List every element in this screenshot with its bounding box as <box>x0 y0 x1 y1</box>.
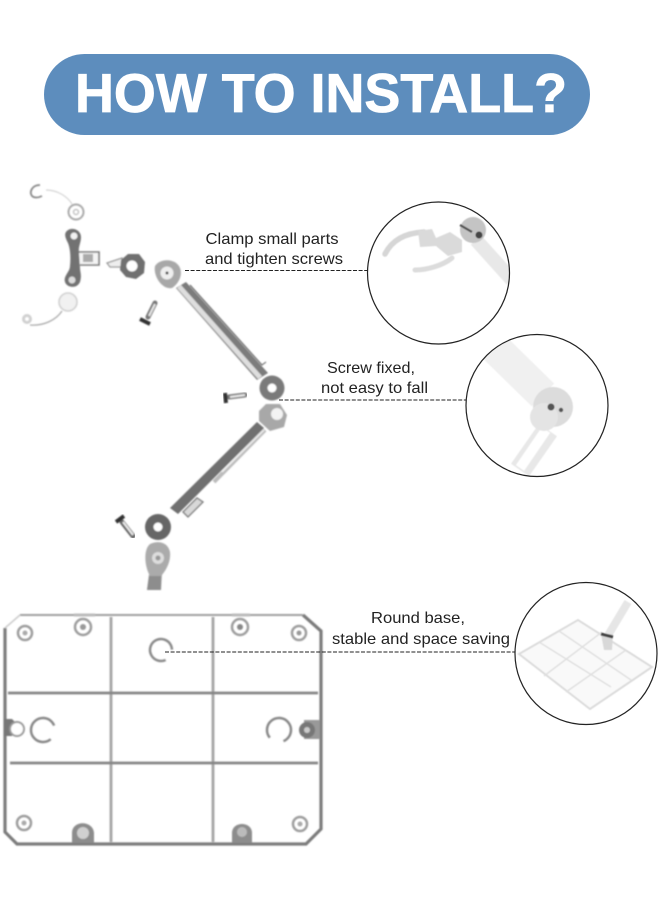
callout: clamp small parts: and tighten screws <box>205 251 343 268</box>
callout: screw fixed: Screw fixed, <box>327 360 415 377</box>
screw three <box>116 516 133 536</box>
callout: round base: stable and space saving <box>332 631 510 648</box>
corner and edge pegs <box>17 615 307 831</box>
detail circle: base <box>515 582 657 724</box>
bottom pegs <box>72 823 252 843</box>
arm base connector <box>145 542 170 590</box>
screw two <box>225 393 245 403</box>
detail circle: joint <box>466 334 608 476</box>
clamp bracket <box>65 229 99 287</box>
title banner: HOW TO INSTALL? <box>75 62 567 124</box>
callout: clamp small parts <box>205 231 343 268</box>
base frame and grid <box>5 615 321 844</box>
dashed leader lines <box>165 270 515 652</box>
callout: round base <box>332 610 510 648</box>
centre socket <box>146 635 176 665</box>
upper clamp finger <box>31 185 84 220</box>
lower clamp finger <box>24 293 77 325</box>
upper arm <box>155 260 284 400</box>
callout: screw fixed <box>321 360 428 397</box>
screw one <box>140 303 155 324</box>
side sockets <box>4 713 320 747</box>
lower arm <box>145 404 287 540</box>
square base <box>4 615 321 844</box>
nut <box>107 254 145 279</box>
callout: screw fixed: not easy to fall <box>321 380 428 397</box>
detail circle: clamp <box>368 202 512 344</box>
callout: round base: Round base, <box>371 610 465 627</box>
exploded clamp parts <box>24 185 155 325</box>
callout: clamp small parts: Clamp small parts <box>206 231 338 248</box>
